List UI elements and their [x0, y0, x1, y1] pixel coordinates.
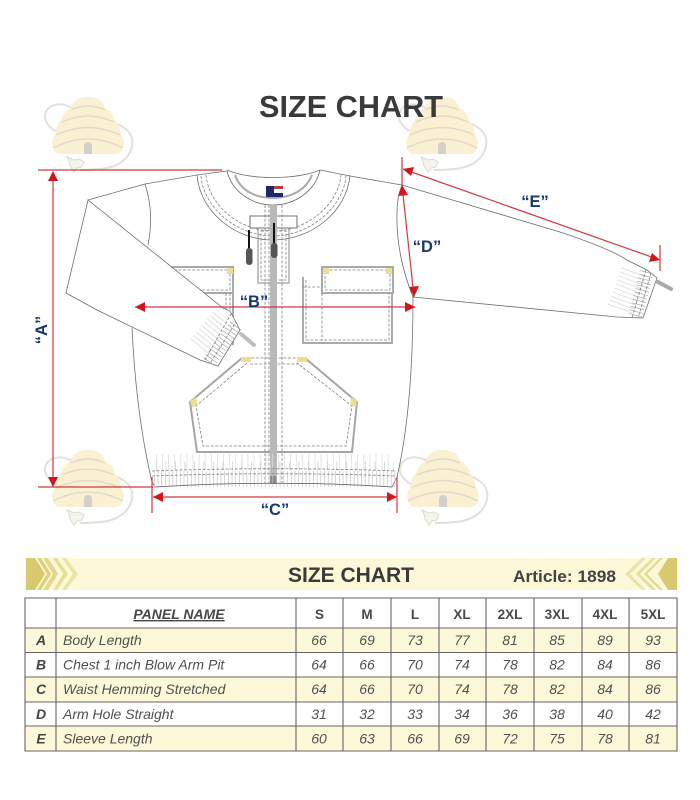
header row: 5XL — [641, 607, 665, 622]
row B: 66 — [359, 656, 375, 672]
row D — [36, 706, 661, 722]
header row: 4XL — [593, 607, 617, 622]
row B: 78 — [502, 656, 518, 672]
right chest pocket — [303, 267, 393, 343]
row A: 66 — [311, 632, 327, 648]
row E — [36, 730, 661, 746]
row C: 66 — [359, 681, 375, 697]
watermark: beehive top right — [399, 97, 486, 172]
brand flag label — [266, 186, 283, 197]
measurement B: chest — [135, 293, 415, 312]
header row: XL — [453, 607, 471, 622]
table banner — [25, 558, 677, 590]
row B: 70 — [407, 656, 423, 672]
row E: Sleeve Length — [63, 730, 153, 746]
row D: D — [36, 706, 46, 722]
row A: 89 — [597, 632, 613, 648]
row E: 69 — [454, 730, 470, 746]
shoulders and armhole — [88, 170, 402, 245]
row D: 33 — [407, 706, 423, 722]
measurement B: chest: “B” — [240, 293, 268, 311]
row C: C — [36, 681, 47, 697]
measurement A: body length — [33, 170, 222, 487]
watermark: beehive bottom right — [400, 450, 487, 525]
chevrons left — [26, 558, 78, 590]
jacket technical drawing — [66, 170, 671, 487]
row C: 74 — [454, 681, 470, 697]
header row: S — [315, 607, 324, 622]
collar — [197, 170, 350, 240]
measurement D: arm hole — [398, 185, 441, 297]
row C: 82 — [549, 681, 565, 697]
measurement C: waist hem — [152, 477, 397, 519]
row A: 81 — [502, 632, 518, 648]
zipper pulls — [246, 223, 278, 265]
row C: Waist Hemming Stretched — [63, 681, 227, 697]
row A: A — [35, 632, 46, 648]
row D: 34 — [454, 706, 470, 722]
header row: L — [411, 607, 419, 622]
row B: 82 — [549, 656, 565, 672]
row C: 84 — [597, 681, 613, 697]
row C — [36, 681, 661, 697]
banner title: SIZE CHART — [288, 563, 414, 587]
title: SIZE CHART — [259, 89, 443, 124]
chevrons right — [625, 558, 677, 590]
measurement C: waist hem: “C” — [261, 501, 289, 519]
row B: Chest 1 inch Blow Arm Pit — [63, 656, 225, 672]
header row: PANEL NAME — [133, 606, 225, 622]
watermark: beehive top left — [45, 97, 132, 172]
left sleeve — [66, 200, 240, 366]
kangaroo pocket — [190, 357, 357, 452]
waist hem — [152, 462, 396, 487]
header row: M — [361, 607, 373, 622]
row D: 31 — [311, 706, 327, 722]
header row — [133, 606, 665, 622]
row E: 66 — [407, 730, 423, 746]
left cuff — [199, 314, 254, 362]
measurement E: sleeve length: “E” — [521, 193, 549, 211]
jacket body — [132, 297, 413, 487]
row E: E — [36, 730, 46, 746]
row A: 93 — [645, 632, 661, 648]
article number: Article: 1898 — [513, 568, 616, 586]
row E: 78 — [597, 730, 613, 746]
measurement A: body length: “A” — [33, 316, 51, 344]
watermark: beehive bottom left — [45, 450, 132, 525]
row D: 40 — [597, 706, 613, 722]
row D: 36 — [502, 706, 518, 722]
row B: 64 — [311, 656, 327, 672]
row D: Arm Hole Straight — [62, 706, 175, 722]
row E: 72 — [502, 730, 518, 746]
row E: 63 — [359, 730, 375, 746]
row D: 32 — [359, 706, 375, 722]
row E: 75 — [549, 730, 565, 746]
measurement E: sleeve length — [402, 157, 660, 271]
row B — [36, 656, 661, 672]
row A: 85 — [549, 632, 565, 648]
row A: 77 — [454, 632, 471, 648]
header row: 3XL — [545, 607, 569, 622]
row C: 78 — [502, 681, 518, 697]
row C: 64 — [311, 681, 327, 697]
measurement D: arm hole: “D” — [413, 238, 441, 256]
row D: 38 — [549, 706, 565, 722]
size table — [25, 598, 677, 751]
row E: 60 — [311, 730, 327, 746]
right sleeve — [397, 185, 657, 318]
row A: Body Length — [63, 632, 142, 648]
row B: 74 — [454, 656, 470, 672]
row B: B — [36, 656, 46, 672]
row A — [35, 632, 661, 648]
row E: 81 — [645, 730, 661, 746]
row A: 73 — [407, 632, 423, 648]
right cuff — [620, 270, 671, 318]
chest placket — [250, 216, 297, 283]
zipper — [265, 205, 282, 484]
row B: 86 — [645, 656, 661, 672]
row D: 42 — [645, 706, 661, 722]
row A: 69 — [359, 632, 375, 648]
row C: 86 — [645, 681, 661, 697]
row B: 84 — [597, 656, 613, 672]
header row: 2XL — [498, 607, 522, 622]
left chest pocket — [160, 267, 233, 345]
row C: 70 — [407, 681, 423, 697]
